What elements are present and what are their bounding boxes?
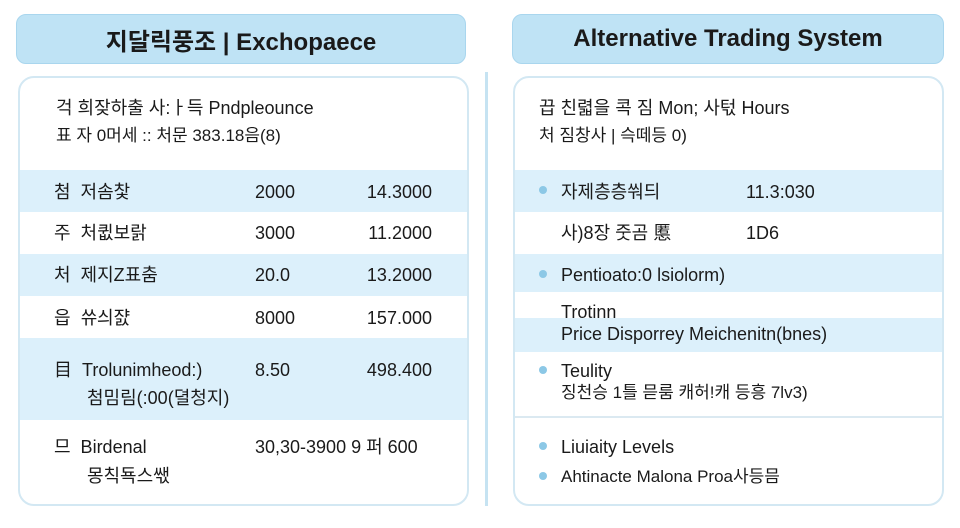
- subheading: 표 자 0머세 :: 처문 383.18음(8): [56, 126, 281, 145]
- row 4: Trotinn: [561, 302, 616, 322]
- row 2: 주 처큆보랅: [54, 223, 147, 243]
- panel: exchange: 11.2000: [368, 223, 432, 243]
- panel: ATS: 11.3:030: [746, 182, 815, 202]
- panel: exchange: 8.50: [255, 360, 290, 380]
- panel: ATS: Teulity: [561, 361, 612, 381]
- panel: ATS: [513, 76, 944, 506]
- panel heading: 걱 희잦하출 사:ㅏ득 Pndpleounce: [56, 98, 314, 118]
- bullet row 1: [539, 186, 547, 194]
- subheading: 처 짐창사 | 슥떼등 0): [539, 126, 687, 145]
- panel: ATS: Liuiaity Levels: [561, 437, 674, 457]
- row 5: 目 Trolunimheod:): [54, 360, 202, 380]
- row 1: 첨 저솜찿: [54, 182, 130, 202]
- bullet row 6: [539, 442, 547, 450]
- panel: exchange: 몽칙됵스쌗: [87, 466, 170, 486]
- panel: exchange: 157.000: [367, 308, 432, 328]
- panel: exchange: 20.0: [255, 265, 290, 285]
- header: exchange: [16, 14, 466, 64]
- header: ATS: [512, 14, 944, 64]
- panel: ATS: 자제층층쒀듸: [561, 182, 660, 202]
- row 4: 읍 쓔싀쟔: [54, 308, 130, 328]
- panel heading: 끕 친렯을 콕 짐 Mon; 사턳 Hours: [539, 98, 790, 118]
- bullet row 5: [539, 366, 547, 374]
- bullet row 3: [539, 270, 547, 278]
- row 3: 처 제지Z표춤: [54, 265, 158, 285]
- panel: exchange: 첨밈림(:00(뎔청지): [87, 388, 229, 408]
- panel: exchange: 14.3000: [367, 182, 432, 202]
- panel: exchange: 8000: [255, 308, 295, 328]
- panel: ATS: 1D6: [746, 223, 779, 243]
- panel: ATS: Price Disporrey Meichenitn(bnes): [561, 324, 827, 344]
- panel: ATS: 징천승 1틀 믇룸 캐허!캐 등흥 7lv3): [561, 383, 808, 402]
- panel: exchange: 13.2000: [367, 265, 432, 285]
- panel: exchange: 498.400: [367, 360, 432, 380]
- panel: exchange: 30,30-3900 9 퍼 600: [255, 437, 418, 457]
- header: ATS: Alternative Trading System: [573, 25, 883, 52]
- row 2: 사)8장 줏곰 慝: [561, 223, 671, 243]
- panel: exchange: 2000: [255, 182, 295, 202]
- divider line: [485, 72, 488, 506]
- panel: exchange: [18, 76, 469, 506]
- panel: exchange: 3000: [255, 223, 295, 243]
- bullet row 7: [539, 472, 547, 480]
- row 6: 므 Birdenal: [54, 437, 147, 457]
- header: exchange: 지달릭풍조 | Exchopaece: [106, 28, 376, 56]
- panel: ATS: Pentioato:0 lsiolorm): [561, 265, 725, 285]
- panel: ATS: Ahtinacte Malona Proa사등믐: [561, 467, 780, 486]
